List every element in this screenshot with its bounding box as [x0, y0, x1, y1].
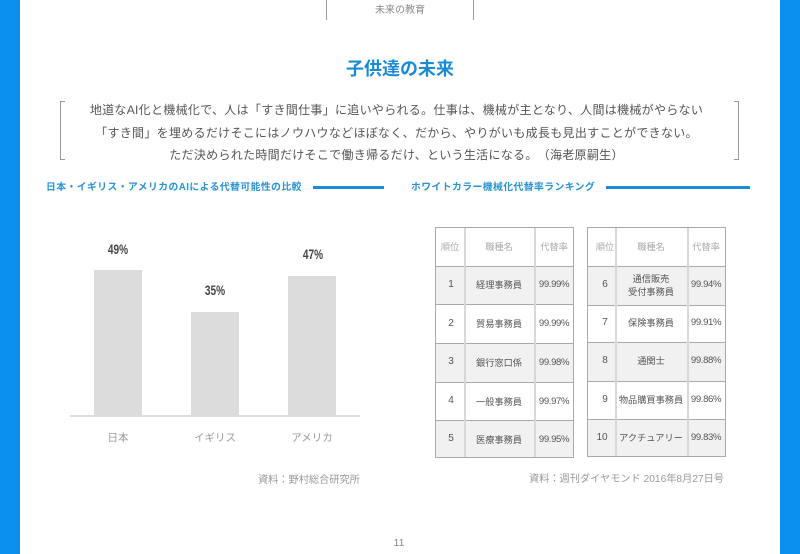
ranking table 1: 順位	[441, 242, 459, 252]
ranking table 2: 99.88%	[691, 355, 721, 366]
left section heading	[46, 182, 384, 192]
ranking table 1: 99.99%	[539, 318, 569, 329]
bar: Japan	[94, 270, 142, 416]
ranking table 2: 10	[596, 432, 608, 443]
row shading	[436, 266, 573, 304]
ranking table 2: 99.86%	[691, 394, 721, 405]
ranking table 1: 代替率	[540, 242, 568, 252]
ranking table 1: 3	[448, 356, 454, 367]
title: 子供達の未来	[346, 59, 454, 79]
ranking table 2: 99.91%	[691, 317, 721, 328]
ranking table 2: 6	[602, 279, 608, 290]
ranking table 2	[587, 227, 726, 457]
ranking table 1: 99.99%	[539, 279, 569, 290]
ranking table 2: 7	[602, 317, 608, 328]
ranking table 2: 通関士	[637, 356, 665, 366]
baseline	[70, 415, 360, 417]
label Japan: 日本	[108, 432, 128, 444]
quote line 3: ただ決められた時間だけそこで働き帰るだけ、という生活になる。（海老原嗣生）	[169, 148, 624, 162]
ranking table 2: 通信販売	[633, 274, 669, 284]
header tab: 未来の教育	[375, 4, 425, 16]
table source: 資料：週刊ダイヤモンド 2016年8月27日号	[529, 474, 724, 485]
left heading text: 日本・イギリス・アメリカのAIによる代替可能性の比較	[46, 182, 302, 192]
right heading rule	[606, 186, 750, 188]
ranking table 1: 99.97%	[539, 396, 569, 407]
ranking table 2: 物品購買事務員	[619, 395, 683, 405]
ranking table 2: 99.83%	[691, 432, 721, 443]
ranking table 1	[435, 227, 574, 458]
left bracket	[60, 101, 65, 160]
ranking table 1: 2	[448, 318, 454, 328]
label UK: イギリス	[194, 432, 236, 444]
value 49%: 49%	[108, 241, 128, 257]
right bracket	[734, 101, 739, 160]
right heading text: ホワイトカラー機械化代替率ランキング	[411, 182, 595, 192]
ranking table 1: 経理事務員	[476, 280, 522, 290]
ranking table 2: 9	[602, 394, 608, 405]
quote block	[60, 101, 739, 162]
ranking table 1: 貿易事務員	[476, 319, 522, 329]
ranking table 2: 受付事務員	[628, 286, 674, 296]
ranking table 1: 4	[448, 395, 454, 406]
ranking table 1: 医療事務員	[476, 435, 522, 445]
ranking table 1: 99.98%	[539, 357, 569, 368]
ranking table 2: 保険事務員	[628, 318, 674, 328]
ranking table 2: アクチュアリー	[619, 433, 683, 443]
row shading	[588, 266, 725, 305]
ranking table 2: 8	[602, 355, 608, 366]
header tab	[326, 0, 474, 20]
quote line 2: 「すき間」を埋めるだけそこにはノウハウなどほぼなく、だから、やりがいも成長も見出すことができない。	[95, 126, 698, 140]
ranking table 1: 一般事務員	[476, 397, 522, 407]
right blue band	[780, 0, 800, 554]
ranking table 1: 職種名	[485, 242, 513, 252]
value 47%: 47%	[303, 246, 323, 262]
bar: USA	[288, 276, 336, 416]
ranking table 1: 銀行窓口係	[476, 358, 522, 368]
quote line 1: 地道なAI化と機械化で、人は「すき間仕事」に追いやられる。仕事は、機械が主となり、人間は機械がやらない	[90, 103, 703, 117]
ranking table 2: 職種名	[637, 242, 665, 252]
chart source: 資料：野村総合研究所	[258, 475, 360, 486]
ranking table 2: 代替率	[692, 242, 720, 252]
page number: 11	[394, 536, 404, 548]
ranking table 2: 99.94%	[691, 279, 721, 290]
bar: UK	[191, 312, 239, 416]
ranking table 1: 5	[448, 433, 454, 444]
ranking table 1: 1	[448, 279, 454, 290]
value 35%: 35%	[205, 282, 225, 298]
right section heading	[411, 181, 750, 192]
left blue band	[0, 0, 20, 554]
bar chart	[70, 241, 360, 444]
left heading rule	[313, 186, 384, 188]
ranking table 2: 順位	[596, 242, 614, 252]
label USA: アメリカ	[291, 432, 333, 444]
ranking table 1: 99.95%	[539, 434, 569, 445]
